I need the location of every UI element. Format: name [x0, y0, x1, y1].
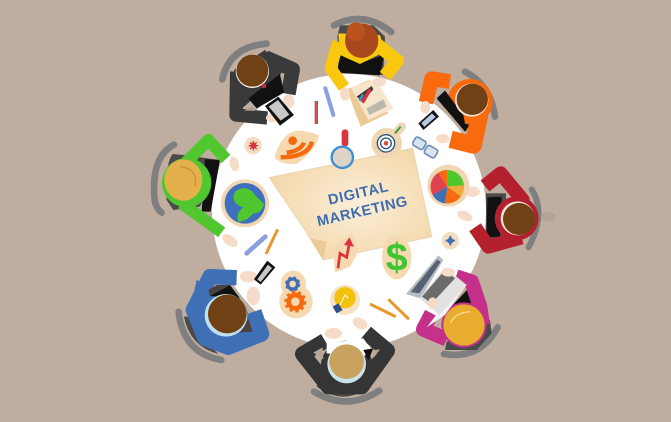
icon: dollar: $	[386, 236, 408, 280]
icon: growth arrow	[333, 233, 358, 273]
title: DIGITAL MARKETING: MARKETING	[316, 194, 409, 230]
person: blue jacket bottom left	[179, 261, 275, 360]
icon: red puzzle	[244, 137, 262, 154]
person: green shirt left	[154, 140, 241, 250]
title: DIGITAL MARKETING: DIGITAL	[327, 179, 390, 209]
icon: light bulb	[330, 285, 360, 315]
icon: pens top	[316, 88, 333, 124]
person: orange shirt top right	[418, 72, 495, 145]
person: dark suit bottom	[303, 315, 387, 401]
icon: target	[371, 127, 402, 159]
icon: globe	[221, 179, 269, 227]
person: yellow sweater top	[331, 19, 397, 101]
icon: glasses	[412, 136, 439, 159]
icon: pens lower left	[247, 229, 278, 254]
icon: gears	[279, 271, 313, 318]
chart: pie	[427, 165, 469, 207]
paper banner	[269, 148, 432, 260]
icon: document with chart	[347, 79, 393, 127]
person: magenta shirt with laptop	[406, 255, 498, 355]
person: red sweater right	[456, 173, 556, 247]
person: black suit top left	[222, 44, 294, 126]
laptop	[406, 255, 467, 327]
icon: RSS	[274, 131, 319, 164]
icon: pencils lower right	[370, 299, 409, 319]
icon: magnifier	[332, 133, 353, 168]
icon: blue puzzle	[442, 232, 459, 249]
table	[212, 74, 486, 348]
